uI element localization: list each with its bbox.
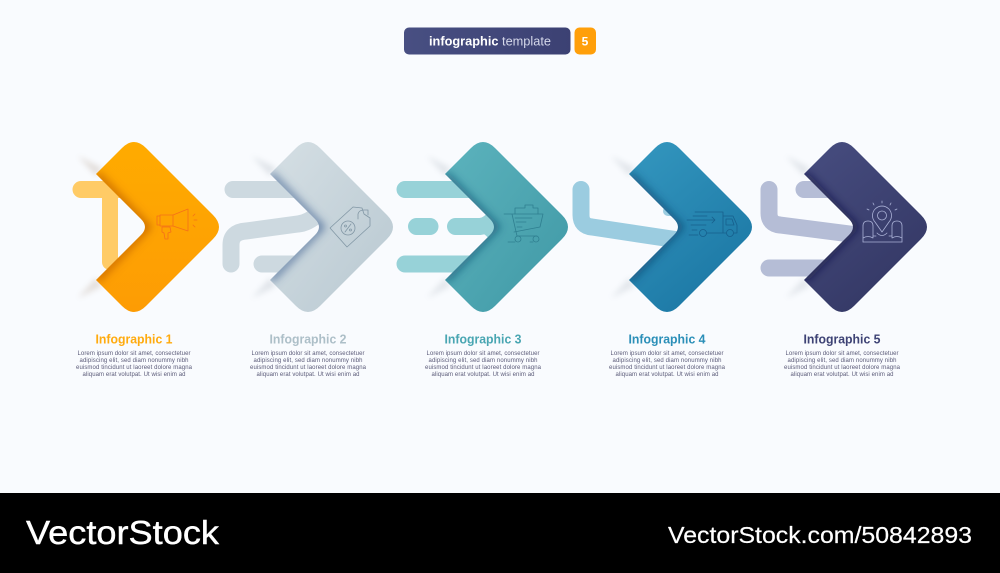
caption 4: euismod tincidunt ut laoreet dolore magna (609, 365, 726, 371)
caption 4: Infographic 4 (628, 332, 706, 346)
caption 2: Infographic 2 (270, 332, 347, 346)
caption 2: adipiscing elit, sed diam nonummy nibh (254, 358, 362, 364)
caption 3: euismod tincidunt ut laoreet dolore magna (425, 365, 542, 371)
caption 4: adipiscing elit, sed diam nonummy nibh (612, 358, 722, 364)
caption 1: Infographic 1 (96, 332, 173, 346)
caption 3 (425, 332, 542, 378)
watermark band: VectorStock (26, 514, 220, 551)
caption 3: adipiscing elit, sed diam nonummy nibh (428, 358, 538, 364)
connector bars 1 (81, 190, 125, 262)
icon: delivery truck (687, 212, 737, 236)
step 5 (769, 142, 927, 312)
caption 5: adipiscing elit, sed diam nonummy nibh (788, 358, 896, 364)
caption 2 (250, 332, 367, 378)
watermark band: VectorStock.com/50842893 (668, 522, 972, 548)
connector bars 3 (405, 190, 496, 264)
connector bars 5 (769, 190, 860, 268)
header badge (404, 28, 596, 54)
caption 3: Lorem ipsum dolor sit amet, consectetuer (426, 351, 540, 357)
caption 1: aliquam erat volutpat. Ut wisi enim ad (82, 372, 186, 378)
caption 1: Lorem ipsum dolor sit amet, consectetuer (78, 351, 190, 357)
caption 3: aliquam erat volutpat. Ut wisi enim ad (432, 372, 534, 378)
arrow 1 (78, 142, 219, 312)
caption 2: aliquam erat volutpat. Ut wisi enim ad (256, 372, 360, 378)
arrow 3 (427, 142, 568, 312)
caption 4: Lorem ipsum dolor sit amet, consectetuer (610, 351, 724, 357)
caption 4 (609, 332, 726, 378)
icon: shopping cart (504, 205, 543, 242)
step 4 (581, 142, 752, 312)
caption 1 (76, 332, 193, 378)
caption 5: Lorem ipsum dolor sit amet, consectetuer (786, 351, 898, 357)
icon: price tag (330, 207, 370, 247)
watermark band (0, 493, 1000, 573)
caption 2: euismod tincidunt ut laoreet dolore magna (250, 365, 367, 371)
caption 4: aliquam erat volutpat. Ut wisi enim ad (616, 372, 718, 378)
step 3 (405, 142, 568, 312)
caption 5: aliquam erat volutpat. Ut wisi enim ad (790, 372, 894, 378)
icon: megaphone (157, 209, 197, 239)
title pill: infographic template (429, 34, 551, 48)
caption 3: Infographic 3 (444, 332, 522, 346)
number badge (574, 28, 596, 54)
arrow 5 (786, 142, 927, 312)
arrow 2 (252, 142, 393, 312)
caption 1: adipiscing elit, sed diam nonummy nibh (80, 358, 188, 364)
caption 1: euismod tincidunt ut laoreet dolore magna (76, 365, 193, 371)
caption 5 (784, 332, 901, 378)
connector bars 4 (581, 190, 685, 241)
caption 5: Infographic 5 (804, 332, 881, 346)
arrow 4 (611, 142, 752, 312)
caption 5: euismod tincidunt ut laoreet dolore magna (784, 365, 901, 371)
number badge: 5 (582, 34, 589, 48)
step 2 (231, 142, 393, 312)
caption 2: Lorem ipsum dolor sit amet, consectetuer (252, 351, 364, 357)
icon: map pin (863, 201, 902, 242)
step 1 (78, 142, 219, 312)
connector bars 2 (231, 190, 318, 264)
title pill (404, 28, 570, 54)
